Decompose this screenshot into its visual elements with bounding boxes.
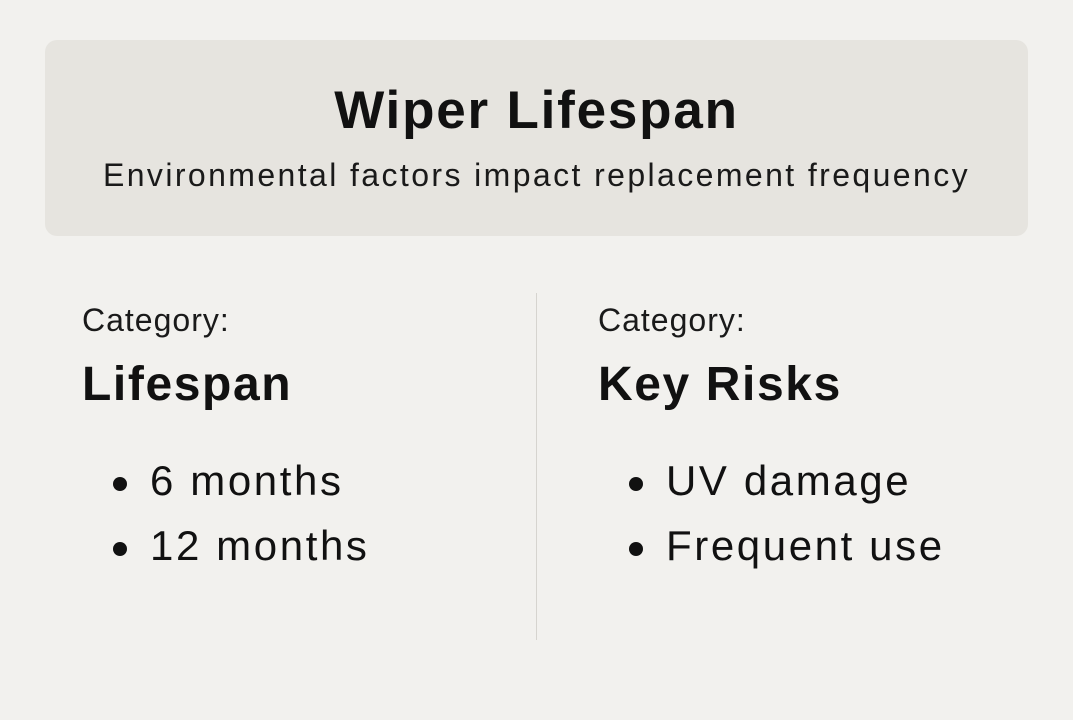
- panel: lifespan: [82, 302, 370, 569]
- title: Wiper Lifespan: [334, 81, 739, 140]
- header panel: [45, 40, 1028, 236]
- bullet: Frequent use: Frequent use: [666, 522, 945, 569]
- category label: Category:: [82, 302, 230, 338]
- bullet list: [629, 457, 945, 569]
- bullet list: [113, 457, 370, 569]
- heading: Lifespan: Lifespan: [82, 358, 292, 411]
- panel: key risks: [598, 302, 945, 569]
- bullet: UV damage: UV damage: [666, 457, 911, 504]
- bullet: 12 months: 12 months: [150, 522, 370, 569]
- heading: Key Risks: Key Risks: [598, 358, 842, 411]
- bullet: 6 months: 6 months: [150, 457, 344, 504]
- category label: Category:: [598, 302, 746, 338]
- subtitle: Environmental factors impact replacement frequency: [103, 157, 970, 193]
